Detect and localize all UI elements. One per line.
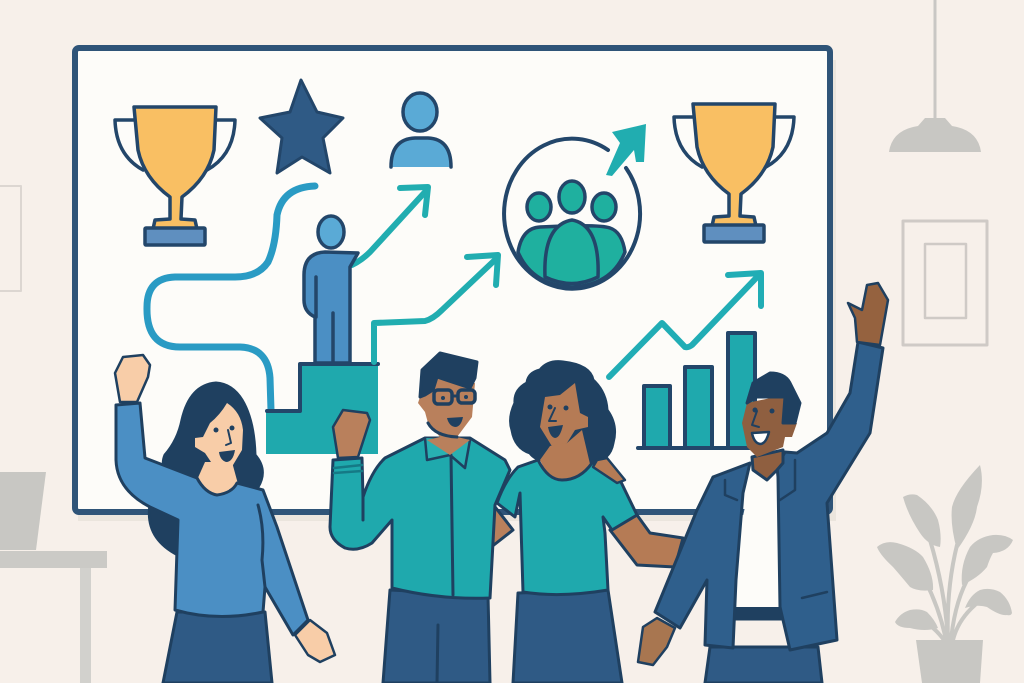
icon: potted plant — [877, 465, 1013, 683]
panel: presentation board — [75, 48, 830, 512]
arrow: stairs to team — [374, 255, 498, 362]
icon: right trophy — [674, 104, 794, 242]
icon: star — [260, 80, 343, 173]
person: man in navy blazer — [638, 283, 888, 683]
arrow: person to upper right — [352, 187, 428, 265]
chart: bars with rising arrow — [609, 273, 765, 448]
icon: person bust — [391, 93, 451, 167]
person: man with glasses — [330, 353, 513, 683]
person: woman with curly hair — [497, 362, 683, 683]
person: woman in blue sweater — [115, 355, 335, 683]
icon: team circle with arrow — [504, 124, 646, 289]
board shadow — [78, 60, 836, 521]
icon: left trophy — [115, 107, 235, 245]
winding path — [147, 186, 315, 410]
stairs and figure — [266, 216, 378, 454]
